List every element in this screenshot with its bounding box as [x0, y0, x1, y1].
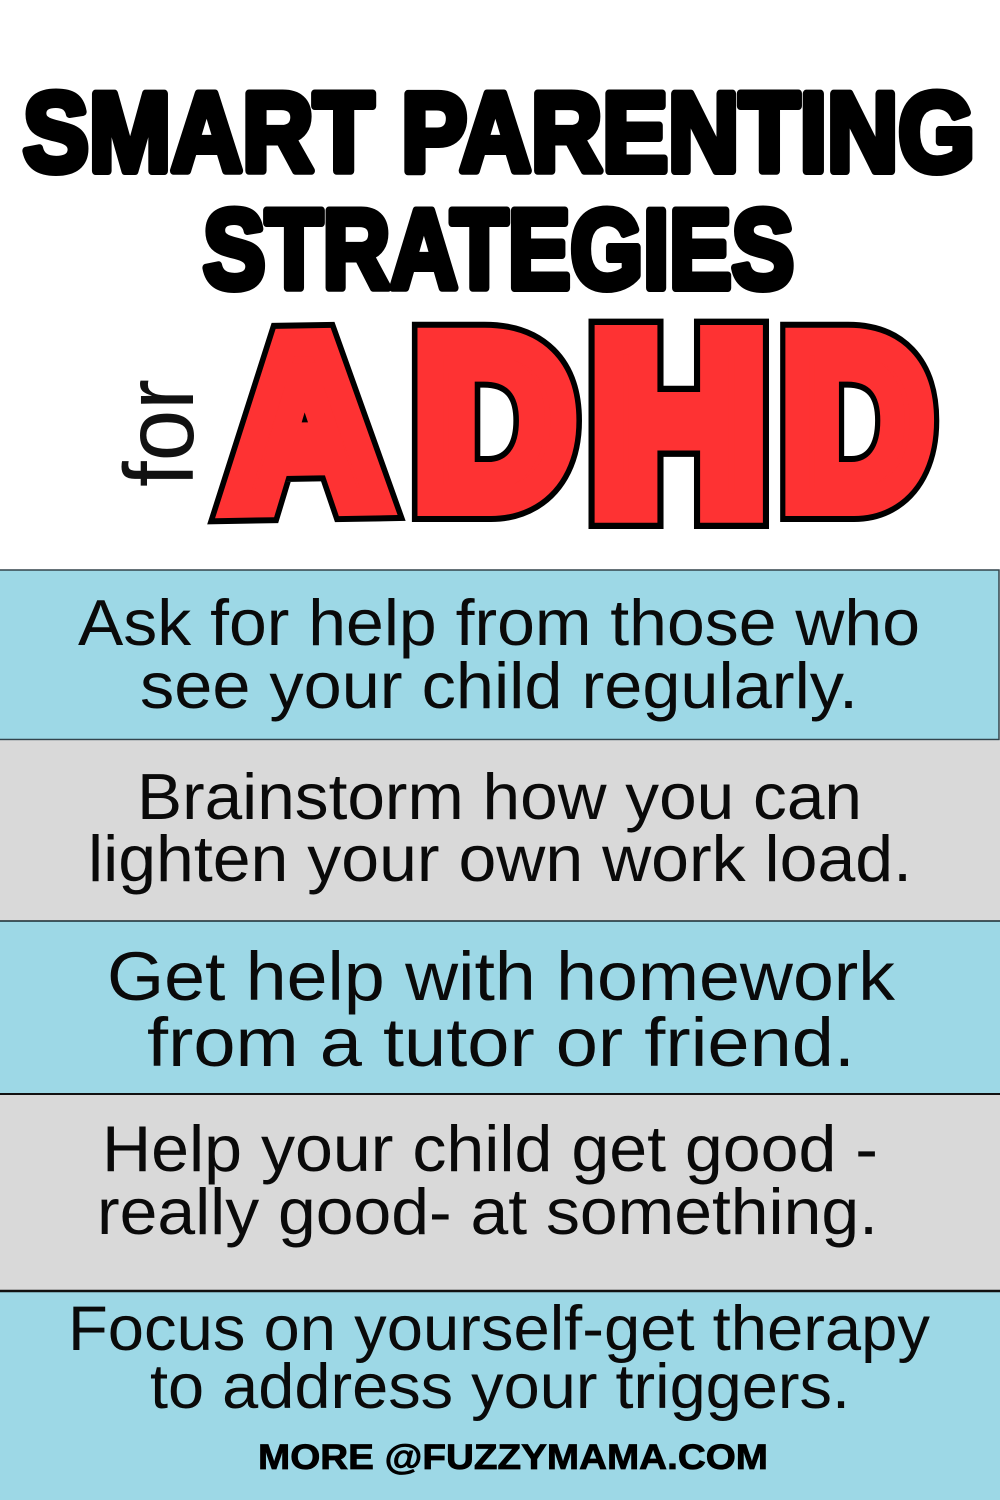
- panel: homework help: from a tutor or friend.: [147, 1004, 855, 1081]
- title: ADHD: D: [416, 291, 572, 552]
- panel: ask for help: [0, 570, 999, 740]
- panel: lighten work load: [0, 740, 1000, 922]
- title: ADHD: H: [593, 288, 765, 561]
- title: ADHD: [224, 288, 930, 561]
- title: ADHD: D: [784, 292, 930, 552]
- title: ADHD: A: [224, 290, 385, 554]
- title: ADHD: D: [784, 292, 930, 552]
- panel: focus on yourself: [0, 1291, 1000, 1500]
- panel: homework help: [0, 921, 1000, 1094]
- title: ADHD: D: [416, 291, 572, 552]
- panel: ask for help: see your child regularly.: [140, 649, 858, 722]
- title: ADHD: A: [224, 290, 385, 554]
- panel: homework help: Get help with homework: [107, 938, 896, 1015]
- panel: focus on yourself: Focus on yourself-get therapy: [68, 1294, 931, 1364]
- title: smart parenting strategies: [23, 70, 975, 312]
- panel: lighten work load: lighten your own work load.: [88, 822, 912, 895]
- panel: get really good at something: Help your child get good -: [102, 1112, 878, 1185]
- panel: focus on yourself: to address your triggers.: [150, 1352, 850, 1422]
- panel: lighten work load: Brainstorm how you can: [137, 760, 862, 833]
- label: for: for: [104, 379, 214, 487]
- footer credit: MORE @FUZZYMAMA.COM: [258, 1438, 768, 1477]
- panel: ask for help: Ask for help from those who: [78, 586, 920, 659]
- panel: get really good at something: [0, 1094, 1000, 1291]
- title: ADHD: H: [593, 288, 765, 561]
- panel: get really good at something: really good- at something.: [97, 1175, 878, 1248]
- title: smart parenting strategies: STRATEGIES: [203, 187, 794, 312]
